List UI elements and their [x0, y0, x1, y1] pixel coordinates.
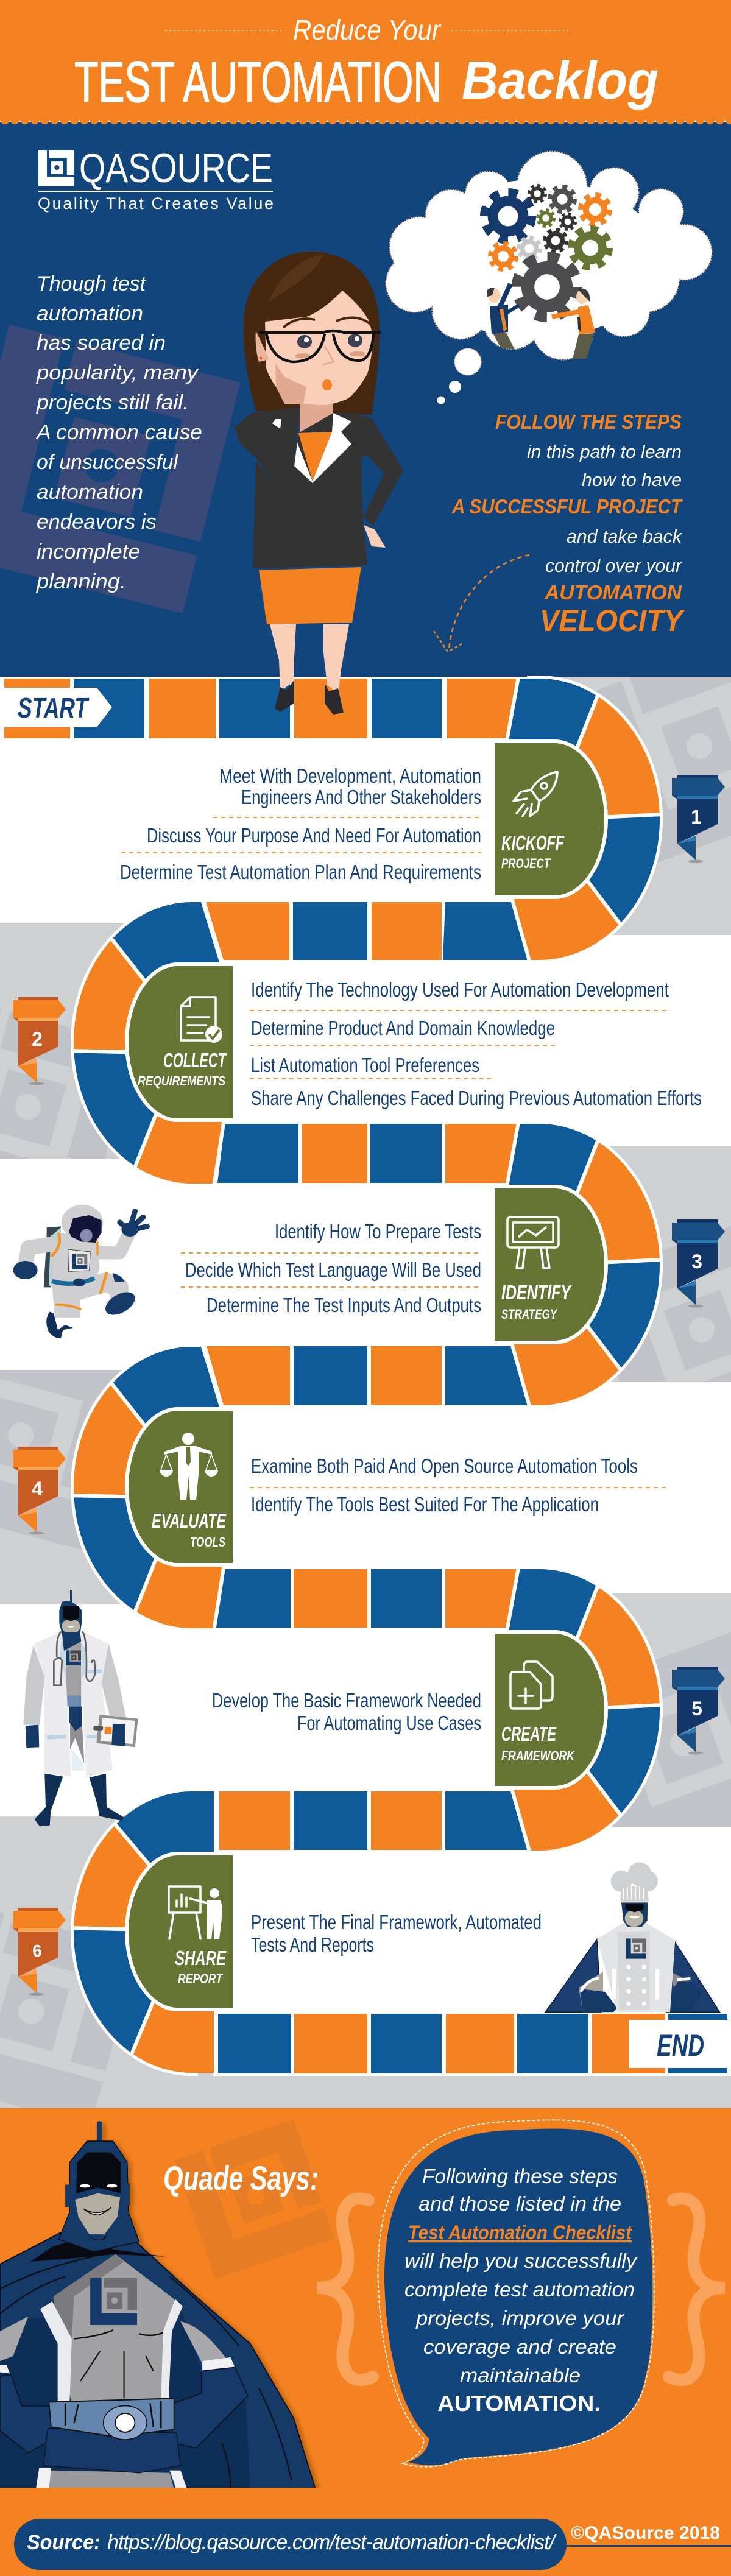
step 2 text: List Automation Tool Preferences — [251, 1054, 479, 1076]
panel: gray backdrop 3 — [609, 1146, 731, 1382]
step 5 text: Develop The Basic Framework Needed — [212, 1689, 481, 1712]
turn 5 right — [493, 1551, 688, 1871]
row A start — [0, 677, 536, 738]
step 4 label: EVALUATE — [152, 1509, 227, 1532]
step 3 text: Identify How To Prepare Tests — [275, 1220, 481, 1243]
turn 2 left — [43, 882, 235, 1207]
end marker — [629, 2020, 731, 2068]
panel: gray backdrop 5 — [610, 1593, 731, 1827]
source bar: https://blog.qasource.com/test-automation-checklist/ — [107, 2531, 557, 2554]
step 2 text: Determine Product And Domain Knowledge — [251, 1017, 555, 1039]
shoes — [275, 681, 294, 712]
step 1 text: Discuss Your Purpose And Need For Automation — [147, 824, 481, 847]
step 2 label — [138, 1049, 227, 1089]
heading: backlog: Backlog — [462, 50, 659, 110]
step 5 text: For Automating Use Cases — [297, 1712, 481, 1734]
character: doctor Quade — [23, 1590, 138, 1826]
text block: intro paragraph: Though test — [37, 272, 147, 295]
speech bubble text: Following these steps — [422, 2165, 618, 2187]
copyright: ©QASource 2018 — [571, 2523, 720, 2543]
speech bubble text: complete test automation — [404, 2278, 635, 2301]
step 3: identify strategy — [181, 1217, 725, 1322]
step 4 text: Identify The Tools Best Suited For The Application — [251, 1493, 599, 1516]
turn 6 left — [71, 1791, 233, 2076]
logo: QASource: QASOURCE — [79, 145, 273, 191]
step 1 text: Determine Test Automation Plan And Requirements — [120, 861, 481, 883]
row F — [219, 1791, 529, 1850]
step 1 text — [120, 764, 481, 883]
icon: rocket — [514, 772, 557, 816]
badge 2 — [13, 997, 66, 1085]
turn 1 right — [493, 660, 688, 980]
badge 5 — [672, 1667, 725, 1754]
text block: intro paragraph: A common cause — [35, 421, 202, 444]
woman face — [265, 291, 373, 405]
badge 2: 2 — [32, 1028, 43, 1050]
step 1 text: Engineers And Other Stakeholders — [241, 786, 481, 808]
panel: gray backdrop 4 — [0, 1370, 122, 1604]
step 2: collect requirements — [13, 978, 702, 1109]
row E — [216, 1569, 518, 1628]
speech bubble text: will help you successfully — [404, 2250, 638, 2272]
step 1 label: KICKOFF — [501, 831, 565, 854]
panel: gray backdrop 2 — [0, 923, 124, 1159]
board path track — [0, 660, 731, 2084]
text block: follow the steps callout: control over your — [545, 555, 683, 576]
badge 6 — [13, 1908, 66, 1996]
badge 6: 6 — [32, 1941, 42, 1960]
speech bubble — [378, 2120, 654, 2467]
step 5 label: FRAMEWORK — [501, 1748, 576, 1763]
step 1 label — [501, 831, 565, 871]
heading: test automation: TEST AUTOMATION — [74, 50, 442, 115]
speech bubble text — [404, 2165, 638, 2416]
heading: reduce your: Reduce Your — [293, 14, 442, 46]
speech bubble text: coverage and create — [423, 2335, 616, 2358]
badge 4 — [13, 1447, 66, 1535]
badge 4: 4 — [32, 1478, 43, 1500]
badge 3 — [672, 1219, 725, 1307]
step 6 label: REPORT — [178, 1971, 223, 1986]
text block: follow the steps callout: AUTOMATION — [544, 581, 682, 604]
step 4 label — [152, 1509, 227, 1550]
step 5 label: CREATE — [501, 1723, 557, 1745]
logo: QASource: Quality That Creates Value — [38, 194, 274, 213]
step 1: kickoff project — [120, 764, 725, 883]
glasses — [259, 331, 381, 362]
step 4 text: Examine Both Paid And Open Source Automation Tools — [251, 1455, 638, 1477]
step 6 text: Tests And Reports — [251, 1933, 374, 1956]
text block: follow the steps callout: VELOCITY — [540, 604, 685, 638]
speech bubble text: projects, improve your — [415, 2307, 625, 2329]
text block: follow the steps callout: in this path to learn — [527, 441, 682, 462]
text block: follow the steps callout — [451, 411, 685, 638]
step 3 text: Determine The Test Inputs And Outputs — [207, 1294, 481, 1316]
heading: quade says: Quade Says: — [163, 2159, 319, 2197]
character: astronaut — [13, 1205, 147, 1338]
row G end — [213, 2011, 731, 2076]
step 3 text: Decide Which Test Language Will Be Used — [185, 1258, 481, 1281]
icon: person holding scales — [160, 1433, 218, 1500]
source bar: Source: — [27, 2531, 101, 2554]
text block: intro paragraph: popularity, many — [36, 361, 199, 384]
step 6 text: Present The Final Framework, Automated — [251, 1911, 542, 1933]
text block: follow the steps callout: FOLLOW THE STEPS — [495, 411, 682, 433]
step 4 text — [250, 1455, 666, 1516]
end marker: END — [657, 2028, 704, 2063]
text block: intro paragraph: automation — [37, 481, 143, 504]
character: superhero Quade — [0, 2121, 316, 2489]
panel: Quade says — [0, 2108, 731, 2576]
blazer — [235, 407, 300, 483]
row D — [207, 1346, 528, 1405]
badge 3: 3 — [691, 1251, 702, 1272]
text block: intro paragraph — [35, 272, 202, 593]
step 3 text — [181, 1220, 481, 1316]
step 3 label: STRATEGY — [501, 1307, 558, 1322]
step 6 text — [251, 1911, 542, 1956]
row B — [206, 902, 529, 960]
icon: two men lifting gear — [487, 284, 595, 359]
start marker — [0, 688, 112, 727]
speech bubble text: and those listed in the — [418, 2192, 621, 2215]
step 4: evaluate tools — [13, 1433, 666, 1550]
speech bubble text: Test Automation Checklist — [408, 2221, 632, 2243]
step 6 label — [175, 1947, 227, 1986]
badge 1: 1 — [691, 806, 702, 828]
step 2 label: COLLECT — [163, 1049, 227, 1071]
panel: gray backdrop 1 — [556, 677, 731, 935]
text block: follow the steps callout: and take back — [567, 526, 682, 547]
panel: header — [0, 0, 731, 125]
character: chef Quade — [545, 1862, 720, 2012]
icon: document with check — [181, 997, 222, 1043]
step 3 label: IDENTIFY — [501, 1281, 572, 1304]
decorative brace right — [669, 2198, 725, 2380]
turn 3 right — [493, 1106, 688, 1425]
step 5: create framework — [212, 1662, 725, 1763]
icon: presentation board chart — [507, 1217, 559, 1268]
source bar — [14, 2519, 731, 2570]
text block: intro paragraph: automation — [37, 302, 143, 325]
step 1 label: PROJECT — [501, 856, 551, 871]
watermark: orange logo — [174, 2119, 334, 2279]
badge 5: 5 — [691, 1698, 702, 1720]
panel: intro background — [0, 122, 731, 677]
thought cloud with gears — [386, 152, 712, 404]
badge 1 — [672, 775, 725, 863]
icon: presenter at board — [169, 1886, 222, 1939]
character: thinking woman — [235, 252, 403, 715]
text block: intro paragraph: has soared in — [37, 331, 166, 355]
arrow: dashed pointer to the path — [434, 555, 529, 652]
decorative brace left — [317, 2198, 373, 2380]
text block: follow the steps callout: A SUCCESSFUL PROJECT — [451, 495, 683, 518]
speech bubble text: maintainable — [460, 2364, 581, 2387]
start marker: START — [18, 692, 90, 724]
text block: follow the steps callout: how to have — [582, 469, 682, 490]
watermark: intro logo — [0, 325, 240, 613]
step 2 text — [250, 978, 702, 1109]
step 3 label — [501, 1281, 572, 1322]
text block: intro paragraph: projects still fail. — [36, 391, 189, 414]
logo: QASource — [38, 145, 274, 213]
step 5 label — [501, 1723, 576, 1763]
text block: intro paragraph: planning. — [36, 570, 126, 593]
step 6: share report — [13, 1886, 542, 1996]
skirt — [259, 567, 361, 624]
row C — [217, 1124, 520, 1183]
step 1 text: Meet With Development, Automation — [219, 764, 481, 787]
text block: intro paragraph: of unsuccessful — [37, 451, 178, 474]
step 2 label: REQUIREMENTS — [138, 1073, 225, 1089]
icon: documents with plus — [510, 1662, 553, 1709]
step 4 label: TOOLS — [190, 1534, 225, 1550]
turn 4 left — [43, 1327, 235, 1651]
panel: gray backdrop 6 — [0, 1816, 731, 2126]
text block: intro paragraph: incomplete — [37, 540, 140, 563]
speech bubble text: AUTOMATION. — [437, 2391, 601, 2416]
text block: intro paragraph: endeavors is — [37, 510, 157, 534]
step 6 label: SHARE — [175, 1947, 227, 1969]
step 5 text — [212, 1689, 481, 1734]
